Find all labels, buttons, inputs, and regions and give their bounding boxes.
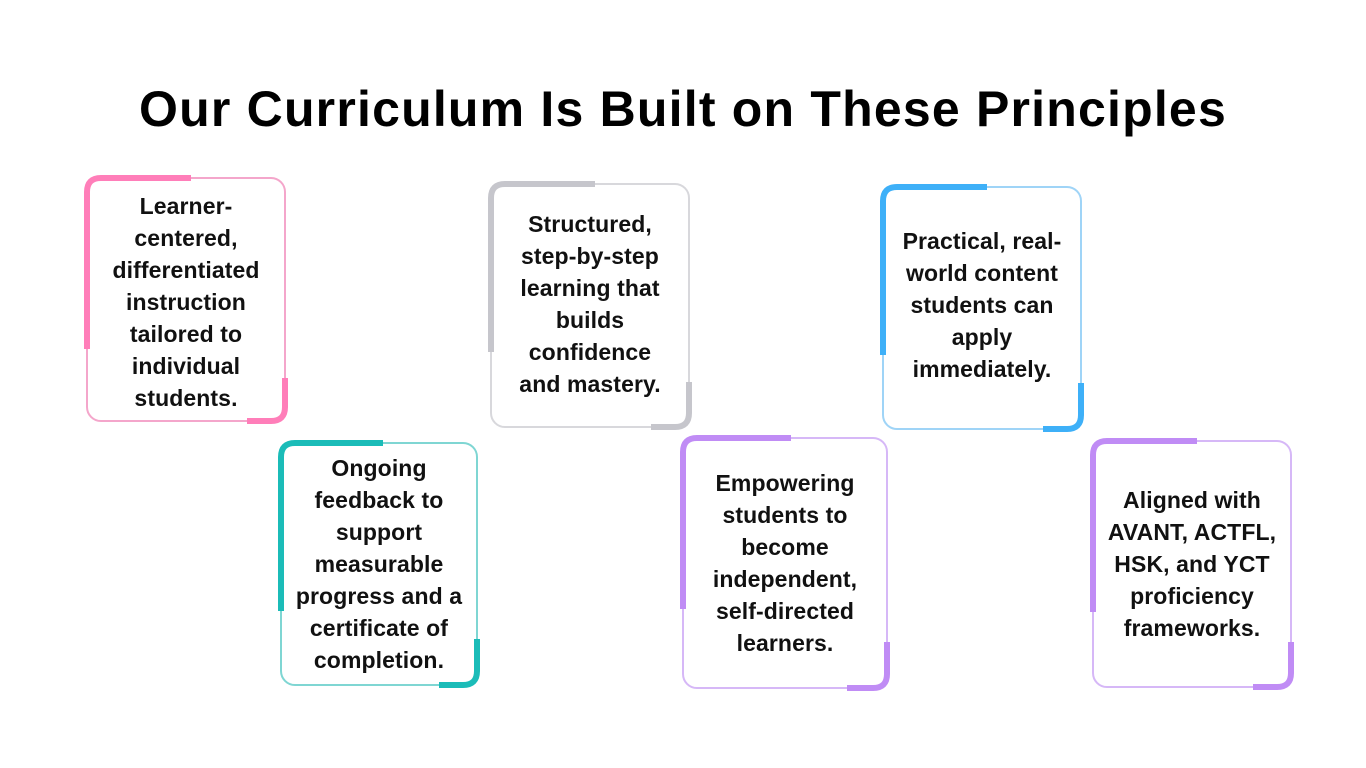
card: ongoing feedback: certificate of — [310, 615, 448, 641]
card: practical: world content — [906, 260, 1058, 286]
card: structured: and mastery. — [519, 370, 661, 396]
card: ongoing feedback — [278, 440, 480, 688]
card: ongoing feedback: progress and a — [296, 583, 462, 609]
card: aligned — [1090, 438, 1294, 690]
card: empowering: Empowering — [715, 470, 854, 496]
card: learner-centered: centered, — [134, 224, 238, 250]
card: empowering: learners. — [737, 630, 833, 656]
card: empowering: independent, — [713, 566, 857, 592]
card: aligned: proficiency — [1130, 583, 1254, 609]
card: learner-centered: instruction — [126, 288, 246, 314]
card: learner-centered: students. — [134, 384, 238, 410]
card: structured: Structured, — [528, 210, 652, 236]
card: structured: confidence — [529, 338, 651, 364]
card: learner-centered: individual — [132, 352, 240, 378]
card: ongoing feedback: measurable — [315, 551, 443, 577]
card: aligned: Aligned with — [1123, 487, 1261, 513]
card: structured: learning that — [520, 274, 660, 300]
card: structured: step-by-step — [521, 242, 659, 268]
card: aligned: HSK, and YCT — [1114, 551, 1270, 577]
card: empowering — [680, 435, 890, 691]
card: practical — [880, 184, 1084, 432]
card: empowering: self-directed — [716, 598, 854, 624]
card: learner-centered: Learner- — [140, 192, 232, 218]
card: learner-centered — [84, 175, 288, 424]
card: ongoing feedback: Ongoing — [331, 455, 427, 481]
card: ongoing feedback: support — [336, 519, 422, 545]
card: ongoing feedback: completion. — [314, 647, 444, 673]
card: practical: apply — [952, 324, 1012, 350]
card: practical: immediately. — [913, 356, 1051, 382]
card: ongoing feedback: feedback to — [315, 487, 443, 513]
card: empowering: become — [741, 534, 829, 560]
card: learner-centered: tailored to — [130, 320, 242, 346]
card: aligned: AVANT, ACTFL, — [1108, 519, 1276, 545]
card: structured: builds — [556, 306, 624, 332]
title: Our Curriculum Is Built on These Principles — [139, 81, 1227, 137]
card: aligned: frameworks. — [1124, 615, 1260, 641]
card: practical: students can — [910, 292, 1054, 318]
card: practical: Practical, real- — [903, 228, 1061, 254]
card: learner-centered: differentiated — [112, 256, 260, 282]
card: structured — [488, 181, 692, 430]
card: empowering: students to — [722, 502, 848, 528]
